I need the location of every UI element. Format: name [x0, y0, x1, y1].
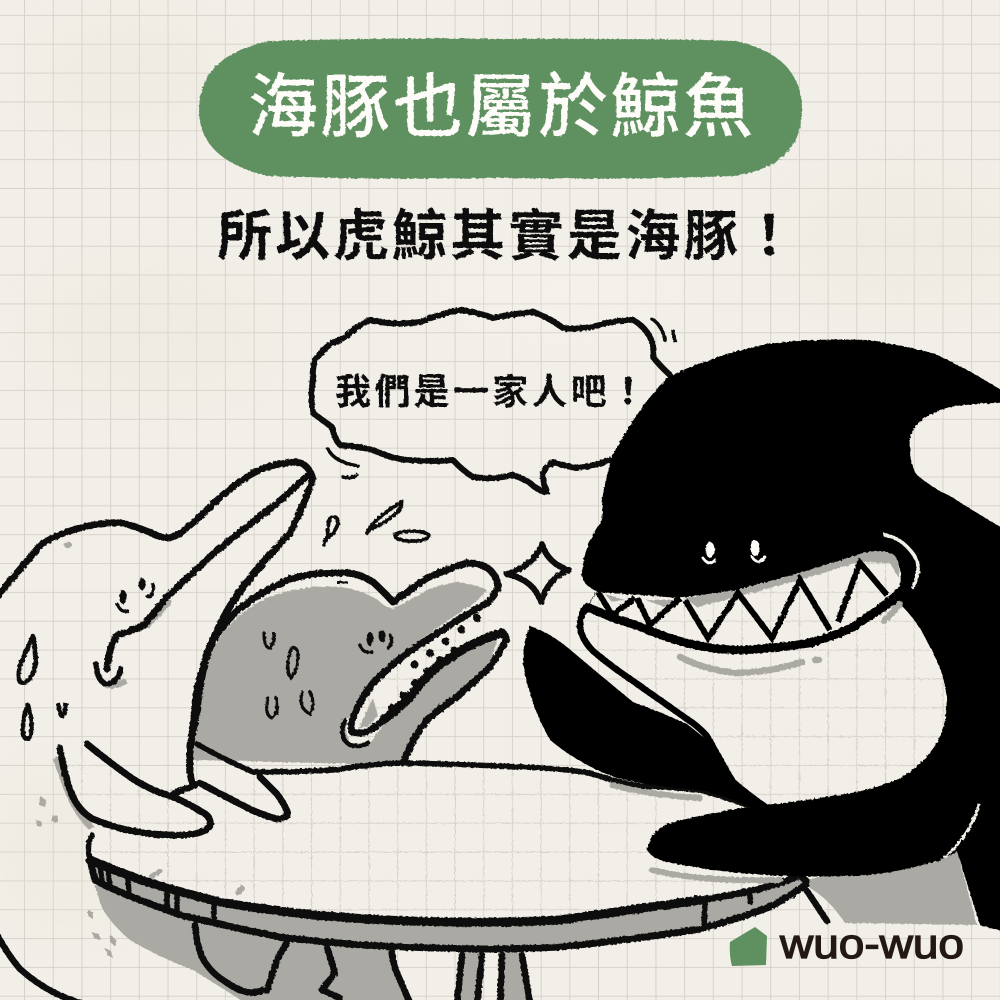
sweat drops — [19, 636, 66, 739]
beak inner thick stroke — [216, 565, 262, 636]
white dolphin — [0, 462, 313, 1000]
table rim band — [90, 860, 808, 949]
orca mouth — [587, 551, 901, 650]
jaw scallops — [392, 643, 466, 708]
flipper right — [173, 777, 288, 819]
motion marks near bubble — [328, 319, 675, 478]
rim edge and dividers — [88, 835, 750, 928]
subtitle text: 所以虎鯨其實是海豚！ — [217, 205, 800, 267]
title text: 海豚也屬於鯨魚 — [248, 68, 756, 146]
gray dolphin — [190, 563, 506, 765]
speech bubble text: 我們是一家人吧！ — [335, 371, 649, 412]
chin mark — [680, 604, 900, 673]
orca flipper — [523, 626, 760, 812]
flipper and belly shadows — [612, 745, 780, 880]
table top edge — [197, 744, 747, 805]
teeth bumps — [400, 618, 477, 674]
logo house — [730, 927, 767, 966]
gray table shadow right — [810, 851, 977, 925]
dolphin eyes and sweat — [264, 633, 392, 718]
logo — [730, 920, 964, 967]
lower jaw thick edge — [383, 633, 502, 720]
orca body — [580, 340, 1000, 932]
table stick — [807, 891, 827, 921]
lip line — [342, 720, 368, 746]
flipper shadow — [57, 760, 90, 826]
dolphin outline — [190, 563, 506, 763]
logo wordmark: wuo-wuo — [779, 920, 964, 967]
mouth gray back — [358, 698, 378, 729]
speech bubble — [312, 310, 670, 492]
table surface — [88, 763, 830, 922]
dolphin mouth — [351, 603, 505, 733]
flipper highlight — [945, 805, 979, 857]
orca belly — [580, 598, 950, 808]
title pill — [199, 38, 802, 179]
dolphin body fill — [190, 582, 497, 765]
table — [88, 744, 830, 949]
cheek highlight — [885, 535, 918, 587]
beak upper line — [107, 474, 309, 669]
table shadow and legs — [95, 885, 530, 1000]
eyes — [117, 584, 153, 612]
gray specks — [36, 542, 116, 958]
dolphin head and beak outline — [0, 462, 313, 783]
action marks above dolphin — [324, 502, 429, 545]
eyes — [706, 540, 760, 558]
lower lip — [587, 595, 897, 650]
orca — [523, 340, 1000, 932]
beak shadow — [148, 482, 300, 626]
flipper left — [60, 744, 210, 835]
lower body line — [0, 933, 84, 1000]
teeth — [598, 563, 887, 638]
sparkle — [507, 544, 569, 602]
thick upper rim line — [90, 860, 700, 922]
mouth shadow — [605, 551, 899, 607]
rim stubs — [152, 871, 242, 893]
mouth hook — [98, 674, 124, 686]
